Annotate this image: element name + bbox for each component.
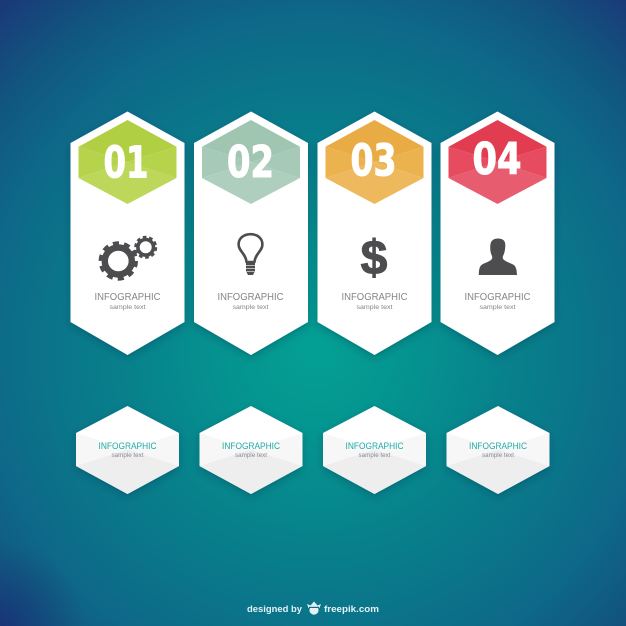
panel: small hexagon 3: sample text (358, 453, 391, 459)
panel: card 01 (70, 112, 184, 355)
panel: small hexagon 4 (446, 406, 550, 494)
panel: small hexagon 2 (200, 406, 302, 494)
panel: card 03 (318, 112, 432, 355)
footer credit (247, 602, 379, 615)
icon: gears (101, 237, 156, 278)
panel: small hexagon 1: sample text (112, 453, 144, 459)
label 03: INFOGRAPHIC (342, 291, 408, 303)
panel: small hexagon 2: INFOGRAPHIC (222, 441, 280, 451)
panel: small hexagon 3: INFOGRAPHIC (346, 441, 404, 451)
label 01 (94, 291, 161, 311)
card shape 01 (70, 112, 184, 355)
card shape 03 (318, 112, 432, 355)
label 01: INFOGRAPHIC (94, 291, 161, 303)
footer credit: freepik.com (324, 604, 379, 615)
number badge 01: 01 (104, 138, 148, 188)
number badge 03 (326, 120, 424, 204)
label 01: sample text (110, 304, 146, 311)
number badge 03: 03 (350, 136, 396, 186)
label 04 (464, 291, 531, 311)
icon: dollar sign: $ (361, 232, 388, 285)
panel: small hexagon 3 (323, 406, 426, 494)
label 04: sample text (480, 304, 516, 311)
icon: person (479, 238, 517, 275)
panel: small hexagon 4: sample text (482, 453, 514, 459)
card shape 04 (440, 112, 554, 355)
label 03 (342, 291, 408, 311)
label 02 (218, 291, 284, 311)
label 03: sample text (356, 304, 393, 311)
label 02: sample text (232, 304, 269, 311)
panel: card 04 (440, 112, 554, 355)
label 04: INFOGRAPHIC (464, 291, 531, 303)
panel: card 02 (194, 112, 308, 355)
icon: light bulb (239, 234, 262, 275)
number badge 04 (448, 120, 546, 204)
icon: crown logo (307, 602, 321, 615)
footer credit: designed by (247, 604, 303, 614)
panel: small hexagon 1: INFOGRAPHIC (98, 441, 157, 451)
panel: small hexagon 4: INFOGRAPHIC (469, 441, 527, 451)
number badge 02: 02 (227, 137, 274, 188)
number badge 02 (202, 120, 300, 204)
label 02: INFOGRAPHIC (218, 291, 284, 303)
number badge 01 (78, 120, 176, 204)
number badge 04: 04 (472, 134, 522, 185)
panel: small hexagon 1 (76, 406, 179, 494)
card shape 02 (194, 112, 308, 355)
panel: small hexagon 2: sample text (235, 453, 267, 459)
